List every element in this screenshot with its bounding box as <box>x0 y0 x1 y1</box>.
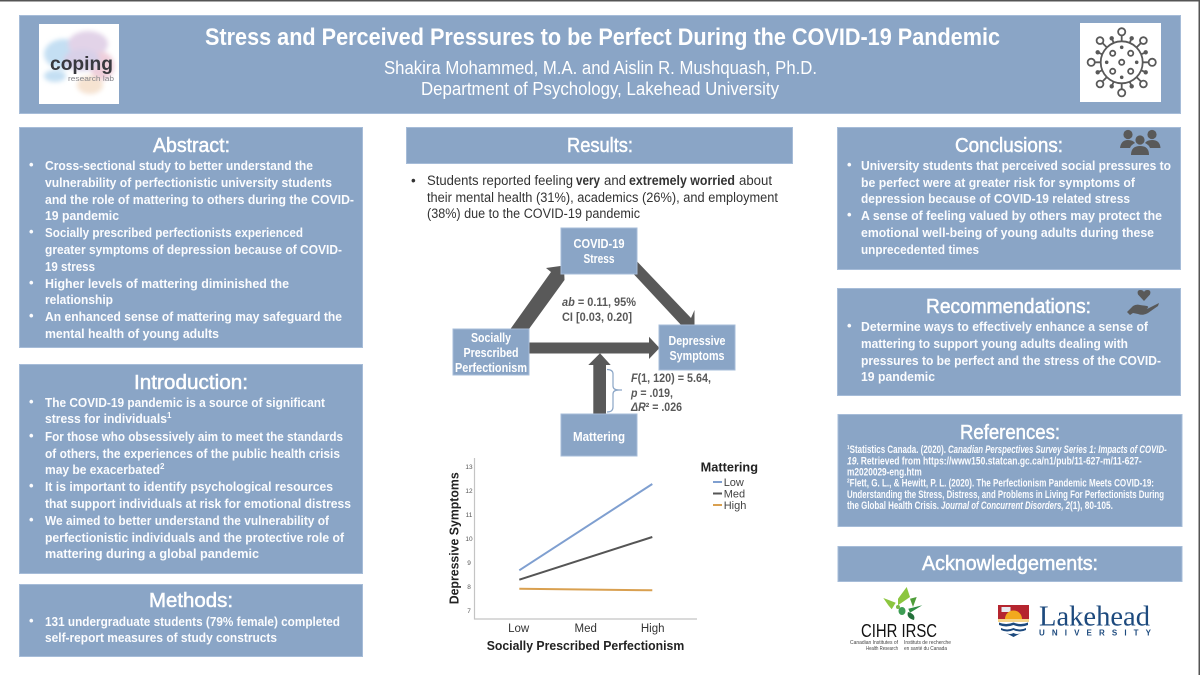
introduction bullets: • <box>29 394 34 409</box>
results bullet text: their mental health (31%), academics (26%), and employment <box>427 190 778 205</box>
reference list: Journal of Concurrent Disorders, 2 <box>941 500 1070 512</box>
box: depressive symptoms <box>659 325 735 370</box>
conclusions bullets: be perfect were at greater risk for symptoms of <box>861 175 1136 190</box>
heading: conclusions: Conclusions: <box>955 135 1063 157</box>
arrow: perfectionism to stress <box>509 266 564 331</box>
conclusions bullets: University students that perceived social pressures to <box>861 158 1171 173</box>
conclusions bullets: depression because of COVID-19 related stress <box>861 191 1130 206</box>
logo: CIHR IRSC: en santé du Canada <box>904 646 948 652</box>
reference list: m2020029-eng.htm <box>847 466 922 478</box>
abstract bullets: mental health of young adults <box>45 326 219 341</box>
box: covid-19 stress <box>561 228 637 274</box>
heading: abstract: Abstract: <box>153 135 230 157</box>
box: socially prescribed perfectionism: Prescribed <box>464 346 518 360</box>
affiliation: Department of Psychology, Lakehead University <box>421 79 779 99</box>
heading: introduction: Introduction: <box>134 372 248 394</box>
recommendations bullet: pressures to be perfect and the stress of the COVID- <box>861 353 1161 368</box>
logo: coping research lab <box>39 24 119 104</box>
abstract bullets: • <box>29 308 34 323</box>
abstract bullets: • <box>29 157 34 172</box>
introduction bullets: We aimed to better understand the vulnerability of <box>45 513 330 528</box>
y tick labels: 9 <box>467 560 471 567</box>
logo: CIHR IRSC <box>850 587 951 652</box>
box: socially prescribed perfectionism <box>453 329 529 375</box>
methods bullet: 131 undergraduate students (79% female) completed <box>45 614 340 629</box>
abstract bullets: relationship <box>45 292 113 307</box>
conclusions bullets: A sense of feeling valued by others may protect the <box>861 208 1162 223</box>
abstract bullets: An enhanced sense of mattering may safeguard the <box>45 309 342 324</box>
abstract bullets: • <box>29 275 34 290</box>
mediation statistic: ab = 0.11, 95% <box>562 295 636 309</box>
line chart: depressive symptoms by perfectionism and mattering <box>446 458 758 653</box>
introduction bullets: may be exacerbated <box>45 462 160 477</box>
logo: CIHR IRSC: Canadian Institutes of <box>850 640 898 646</box>
panel: methods <box>20 584 362 656</box>
panel: references <box>838 414 1182 526</box>
legend: Med <box>724 488 745 500</box>
introduction bullets: 1 <box>167 411 172 420</box>
conclusions bullets: • <box>847 157 852 172</box>
logo: Lakehead University: Lakehead <box>1039 600 1150 632</box>
moderation statistic: ΔR² = .026 <box>630 400 682 414</box>
abstract bullets: • <box>29 224 34 239</box>
results bullet text: and <box>604 173 626 188</box>
abstract bullets: greater symptoms of depression because of COVID- <box>45 242 342 257</box>
logo: CIHR IRSC: Health Research <box>866 646 898 652</box>
recommendations bullet: Determine ways to effectively enhance a sense of <box>861 319 1149 334</box>
legend: Low <box>724 477 744 489</box>
introduction bullets: For those who obsessively aim to meet the standards <box>45 429 343 444</box>
panel: results heading <box>406 128 792 164</box>
reference list: 19. <box>847 456 859 468</box>
reference list: the Global Health Crisis. <box>847 500 939 512</box>
reference list: ¹Statistics Canada. (2020). <box>847 444 946 456</box>
abstract bullets: and the role of mattering to others during the COVID- <box>45 192 354 207</box>
y tick labels: 8 <box>467 584 471 591</box>
x axis title: Socially Prescribed Perfectionism <box>487 638 684 653</box>
y tick labels: 13 <box>465 464 473 471</box>
mediation statistic: CI [0.03, 0.20] <box>562 310 632 324</box>
results bullet text: very <box>576 173 600 188</box>
recommendations bullet: • <box>847 318 852 333</box>
y tick labels <box>465 464 473 615</box>
methods bullet <box>29 613 340 645</box>
title: Stress and Perceived Pressures to be Perfect During the COVID-19 Pandemic <box>205 24 1000 51</box>
header banner <box>20 16 1180 114</box>
introduction bullets: stress for individuals <box>45 411 167 426</box>
introduction bullets: 2 <box>160 462 165 471</box>
recommendations bullet <box>847 318 1161 384</box>
introduction bullets: It is important to identify psychological resources <box>45 479 333 494</box>
chart axes <box>474 458 697 619</box>
methods bullet: self-report measures of study constructs <box>45 630 277 645</box>
introduction bullets: • <box>29 512 34 527</box>
icon: virus <box>1080 23 1161 102</box>
panel: acknowledgements <box>838 546 1182 582</box>
panel: recommendations <box>838 288 1180 396</box>
box: depressive symptoms: Depressive <box>668 334 726 348</box>
arrow: mattering moderation <box>588 353 611 415</box>
y tick labels: 11 <box>466 512 473 519</box>
introduction bullets: that support individuals at risk for emotional distress <box>45 496 351 511</box>
introduction bullets: of others, the experiences of the public health crisis <box>45 446 340 461</box>
line: medium mattering <box>519 537 652 580</box>
legend: High <box>724 500 746 512</box>
logo: coping research lab: coping <box>50 54 113 75</box>
reference list <box>847 444 1167 512</box>
logo: CIHR IRSC: Instituts de recherche <box>904 640 951 646</box>
panel: conclusions <box>838 128 1180 270</box>
conclusions bullets: emotional well-being of young adults during these <box>861 225 1154 240</box>
methods bullet: • <box>29 613 34 628</box>
conclusions bullets <box>847 157 1171 257</box>
heading: methods: Methods: <box>149 590 233 612</box>
recommendations bullet: mattering to support young adults dealing with <box>861 336 1128 351</box>
brace <box>607 370 622 412</box>
y tick labels: 10 <box>465 536 473 543</box>
results bullet text: about <box>739 173 772 188</box>
maple leaf mark <box>883 587 922 620</box>
logo: Lakehead University <box>998 600 1152 638</box>
box: socially prescribed perfectionism: Perfectionism <box>455 361 527 375</box>
x tick labels: Low <box>508 623 530 635</box>
box: covid-19 stress: Stress <box>584 252 615 266</box>
logo: Lakehead University: UNIVERSITY <box>1039 628 1152 638</box>
abstract bullets: 19 pandemic <box>45 208 119 223</box>
x tick labels: High <box>641 623 665 635</box>
abstract bullets <box>29 157 354 341</box>
reference list: (1), 80-105. <box>1070 500 1113 512</box>
x tick labels: Med <box>575 623 597 635</box>
recommendations bullet: 19 pandemic <box>861 369 935 384</box>
panel: introduction <box>20 364 362 574</box>
introduction bullets: • <box>29 478 34 493</box>
abstract bullets: Higher levels of mattering diminished the <box>45 276 289 291</box>
panel: abstract <box>20 128 362 348</box>
introduction bullets: • <box>29 428 34 443</box>
icon: group of people <box>1120 130 1160 155</box>
line: low mattering <box>519 484 652 570</box>
x tick labels <box>508 623 665 635</box>
arrow: perfectionism to depressive symptoms <box>528 337 660 359</box>
conclusions bullets: • <box>847 207 852 222</box>
y tick labels: 7 <box>467 608 471 615</box>
box: mattering: Mattering <box>573 430 625 444</box>
legend: Mattering <box>701 460 758 474</box>
results bullet text <box>411 173 778 221</box>
y axis title: Depressive Symptoms <box>446 472 462 604</box>
y tick labels: 12 <box>465 488 473 495</box>
introduction bullets: The COVID-19 pandemic is a source of significant <box>45 395 326 410</box>
moderated mediation diagram <box>453 228 735 456</box>
results bullet text: • <box>411 173 416 188</box>
abstract bullets: Cross-sectional study to better understand the <box>45 158 313 173</box>
line: high mattering <box>519 589 652 590</box>
panel: acknowledgements: Acknowledgements: <box>922 553 1098 575</box>
heading: references: References: <box>960 422 1060 444</box>
moderation statistic: F(1, 120) = 5.64, <box>631 371 711 385</box>
box: depressive symptoms: Symptoms <box>670 349 725 363</box>
results bullet text: (38%) due to the COVID-19 pandemic <box>427 206 640 221</box>
logo: coping research lab: research lab <box>68 74 114 83</box>
crest <box>998 605 1029 637</box>
arrow: stress to depressive symptoms <box>628 254 694 326</box>
abstract bullets: vulnerability of perfectionistic university students <box>45 175 332 190</box>
mediation statistic <box>562 295 636 324</box>
panel: results heading: Results: <box>567 135 633 157</box>
introduction bullets <box>29 394 351 561</box>
results bullet text: Students reported feeling <box>427 173 573 188</box>
abstract bullets: Socially prescribed perfectionists experienced <box>45 225 303 240</box>
introduction bullets: perfectionistic individuals and the protective role of <box>45 530 345 545</box>
box: covid-19 stress: COVID-19 <box>574 237 625 251</box>
conclusions bullets: unprecedented times <box>861 242 979 257</box>
authors: Shakira Mohammed, M.A. and Aislin R. Mushquash, Ph.D. <box>384 58 817 78</box>
abstract bullets: 19 stress <box>45 259 95 274</box>
moderation statistic <box>630 371 711 414</box>
results bullet text: extremely worried <box>629 173 735 188</box>
logo: CIHR IRSC: CIHR IRSC <box>861 620 937 641</box>
moderation statistic: p = .019, <box>630 386 673 400</box>
box: mattering <box>561 414 637 456</box>
heading: recommendations: Recommendations: <box>926 296 1091 318</box>
legend <box>701 460 758 512</box>
box: socially prescribed perfectionism: Socially <box>471 331 511 345</box>
introduction bullets: mattering during a global pandemic <box>45 546 259 561</box>
icon: heart in hand <box>1127 290 1159 315</box>
